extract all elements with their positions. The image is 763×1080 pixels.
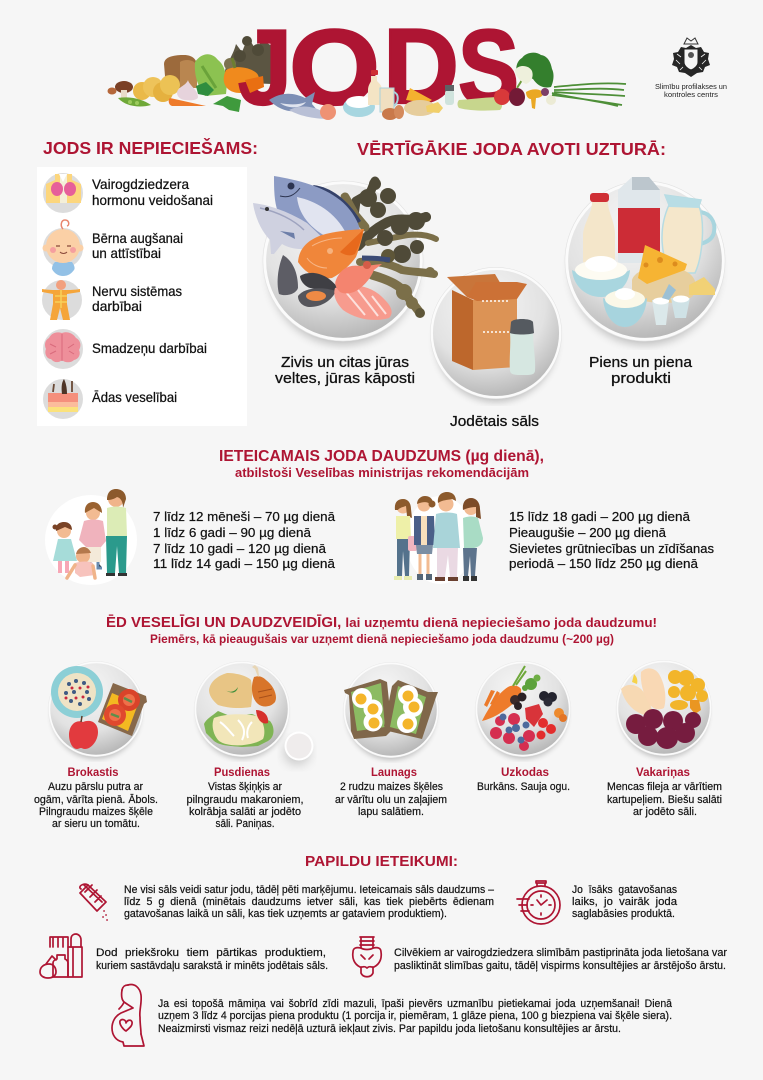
plate: dinner [616,660,712,758]
caption: fish and seafood: Zivis un citas jūras [281,354,409,371]
caption: fish and seafood: veltes, jūras kāposti [275,370,415,387]
meal: breakfast text: Pilngraudu maizes šķēle [39,806,153,818]
text: thyroid hormones: Vairogdziedzera [92,176,189,192]
caption: milk and dairy [589,354,693,387]
logo text: Slimību profilakses un [655,82,727,91]
icon: skin [43,379,83,419]
meal: afternoon snack text: 2 rudzu maizes šķēles [340,781,443,793]
milk carton [618,177,660,263]
icon: brain [43,329,83,369]
text: recommended amount for children: 1 līdz 6 gadi – 90 µg dienā [153,525,312,540]
text: recommended amount for teens and adults [509,509,714,571]
caption: iodised salt: Jodētais sāls [450,413,539,430]
salmon steak [298,229,364,278]
tip: food choice: Dod priekšroku tiem pārtikas produktiem, [96,947,326,959]
tip: salt: Ne visi sāls veidi satur jodu, tādēļ pēti marķējumu. Ieteicamais sāls daudzums – [124,884,495,896]
meal: dinner text: kartupeļiem. Biešu salāti [607,794,722,806]
meal: snack text [477,767,570,793]
text: recommended amount for children: 11 līdz 14 gadi – 150 µg dienā [153,556,336,571]
title: D [383,6,459,126]
glass of kefir [284,732,314,764]
woman with phone [414,496,436,580]
plate: milk and dairy [565,177,725,344]
text: recommended amount for teens and adults: Sievietes grūtniecības un zīdīšanas [509,541,714,556]
older child [79,502,106,568]
tip: salt [124,884,495,920]
meal: lunch text: pilngraudu makaroniem, [186,794,304,806]
meal: breakfast text: ar sieru un tomātu. [52,818,140,830]
oatmeal bowl [51,666,103,718]
left toast with eggs [344,679,392,739]
icon: salt shaker [80,884,107,920]
tip: thyroid disease: Cilvēkiem ar vairogdziedzera slimībām pastiprināta joda lietošana var [394,947,727,959]
heading: recommended iodine amount: atbilstoši Veselības ministrijas rekomendācijām [235,466,529,480]
text: nervous system function [92,283,182,314]
title [238,6,519,127]
meal: snack text: Uzkodas [501,767,549,779]
plate: afternoon snack [343,662,439,760]
mussels [278,255,338,307]
icon: groceries [40,934,82,978]
meal: dinner text: Vakariņas [636,767,690,779]
pregnant woman [463,498,483,581]
tip: cooking time: saglabāsies produktā. [572,908,675,920]
heading: eat healthy and varied [106,614,657,646]
heading: most valuable sources: VĒRTĪGĀKIE JODA AVOTI UZTURĀ: [357,139,666,159]
basil [225,687,238,693]
text: recommended amount for teens and adults: periodā – 150 līdz 250 µg dienā [509,556,699,571]
text: nervous system function: Nervu sistēmas [92,283,182,299]
fish [253,176,361,254]
salt shaker [510,319,535,375]
text: skin health: Ādas veselībai [92,389,177,405]
meal: afternoon snack text: Launags [371,767,417,779]
salt box [447,274,527,370]
text: thyroid hormones [92,176,213,208]
tip: food choice [96,947,328,972]
text: brain function: Smadzeņu darbībai [92,340,207,356]
caption: fish and seafood [275,354,415,387]
toddler [52,522,77,573]
milk bottle [583,193,615,266]
text: recommended amount for children [153,509,336,571]
header food illustration: left group [108,36,272,112]
right toast with eggs [384,680,438,739]
toast with cheese and tomato [98,683,147,736]
pasta [209,673,252,708]
herbs and berries [490,674,567,751]
kohlrabi salad [204,711,274,747]
tip: cooking time: laiks, jo vairāk joda [572,896,678,908]
illustration: family with children [45,489,137,585]
heading: recommended iodine amount [219,448,544,480]
text: nervous system function: darbībai [92,298,142,314]
text: child growth: un attīstībai [92,245,161,261]
meal: breakfast text: ogām, vārīta pienā. Ābols. [34,794,158,806]
text: recommended amount for teens and adults: Pieaugušie – 200 µg dienā [509,525,667,540]
illustration: teens and adults [394,492,483,584]
meal: afternoon snack text: ar vārītu olu un zaļajiem [335,794,447,806]
icon: stopwatch [517,881,560,924]
heading: additional tips: PAPILDU IETEIKUMI: [305,854,458,870]
logo text [655,82,727,99]
tip: salt: līdz 5 g dienā (minētais daudzums ietver sāli, kas tiek piebērts ēdienam [124,896,494,908]
meal: breakfast text: Brokastis [68,767,118,779]
plate: fish and seafood [253,176,436,344]
apple [69,716,98,749]
plate: iodised salt [430,267,562,401]
meal: dinner text: ar jodēto sāli. [633,806,697,818]
meal: breakfast text: Auzu pārslu putra ar [48,781,143,793]
text: recommended amount for teens and adults: 15 līdz 18 gadi – 200 µg dienā [509,509,691,524]
beets [626,709,701,749]
seaweed [345,178,436,318]
tip: cooking time [572,884,678,920]
plate: lunch [194,661,290,759]
heading: iodine is necessary: JODS IR NEPIECIEŠAMS: [43,137,258,158]
heading: recommended iodine amount: IETEICAMAIS JODA DAUDZUMS (µg dienā), [219,448,544,465]
man [433,492,460,581]
heading: eat healthy and varied: ĒD VESELĪGI UN DAUDZVEIDĪGI, lai uzņemtu dienā nepieciešamo joda daudzumu! [106,614,657,631]
title: O [289,7,380,127]
meal: afternoon snack text [335,767,447,818]
meal: lunch text [186,767,304,830]
icon: baby [42,220,84,276]
cottage cheese bowl [572,256,630,297]
caption: milk and dairy: produkti [611,370,671,387]
text: child growth: Bērna augšanai [92,230,183,246]
caption: milk and dairy: Piens un piena [589,354,693,371]
title: S [458,7,519,127]
meal: lunch text: Pusdienas [214,767,270,779]
plate: snack [475,661,571,759]
panel: benefits of iodine [37,167,247,426]
chicken leg [252,665,276,706]
text: child growth [92,230,183,261]
tip: pregnancy and breastfeeding: Ja esi topošā māmiņa vai šobrīd zīdi mazuli, īpaši pievērs uzmanību pietiekamai joda uzņemšanai! Dienā [158,998,673,1010]
carrots [482,666,526,721]
potatoes [668,670,708,714]
text: recommended amount for children: 7 līdz 12 mēneši – 70 µg dienā [153,509,336,524]
cod fillets [621,668,665,715]
meal: breakfast text [34,767,158,830]
meal: lunch text: kolrābja salāti ar jodēto [189,806,301,818]
tip: pregnancy and breastfeeding: Neaizmirsti vismaz reizi nedēļā uzturā iekļaut zivis. Par papildu joda lietošanu konsultējies ar ārstu. [158,1023,621,1035]
tip: food choice: kuriem sastāvdaļu sarakstā ir minēts jodētais sāls. [96,960,328,972]
header food illustration: middle and right group [245,53,626,120]
text: recommended amount for children: 7 līdz 10 gadi – 120 µg dienā [153,541,327,556]
cheese [632,245,715,303]
milk jug [662,195,714,273]
tip: thyroid disease: pasliktināt slimības gaitu, tādēļ vispirms konsultējies ar ārstējošo ārstu. [394,960,726,972]
meal: afternoon snack text: lapu salātiem. [358,806,424,818]
sour cream bowl [603,288,647,327]
icon: pregnant woman [112,985,144,1046]
mother [106,489,127,576]
meal: dinner text: Mencas fileja ar vārītiem [607,781,722,793]
yoghurt cups [652,284,690,325]
logo: coat of arms [672,38,710,77]
tip: salt: gatavošanas laikā un sāli, kas tiek uzņemts ar gataviem produktiem). [124,908,447,920]
meal: lunch text: Vistas šķiņķis ar [208,781,282,793]
plate: breakfast [48,661,147,759]
icon: thyroid gland [353,937,381,977]
teenage girl [394,499,417,580]
tomato slices [256,710,268,723]
meal: dinner text [607,767,722,818]
meal: lunch text: sāli. Paniņas. [216,818,274,830]
meal: snack text: Burkāns. Sauja ogu. [477,781,570,793]
heading: eat healthy and varied: Piemērs, kā pieaugušais var uzņemt dienā nepieciešamo joda daudzumu (~200 µg) [150,632,614,646]
tip: cooking time: Jo īsāks gatavošanas [572,884,677,896]
tip: pregnancy and breastfeeding [158,998,673,1035]
salmon fillet and shrimp [334,258,392,320]
title: J [238,7,292,127]
icon: thyroid [43,173,83,213]
icon: nervous system [42,280,82,320]
tip: thyroid disease [394,947,727,972]
baby [67,547,95,578]
logo text: kontroles centrs [664,90,718,99]
text: thyroid hormones: hormonu veidošanai [92,192,213,208]
tip: pregnancy and breastfeeding: uzņem 3 līdz 4 porcijas piena produktu (1 porcija ir, piemēram, 1 glāze piena, 100 g biezpiena vai šķēle siera). [158,1010,672,1022]
